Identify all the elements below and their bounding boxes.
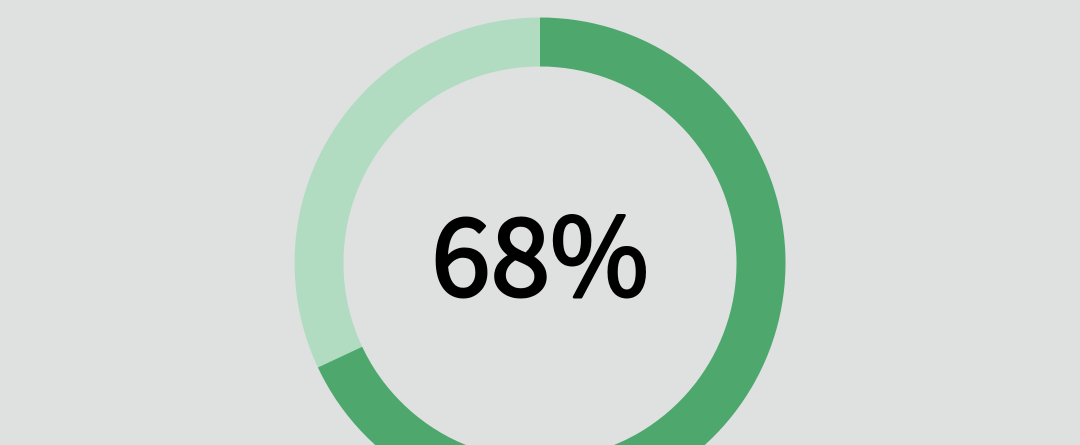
center value label: 68% bbox=[431, 172, 649, 326]
ring track: remaining 32% bbox=[295, 18, 540, 368]
ring value: 68% bbox=[318, 17, 786, 445]
